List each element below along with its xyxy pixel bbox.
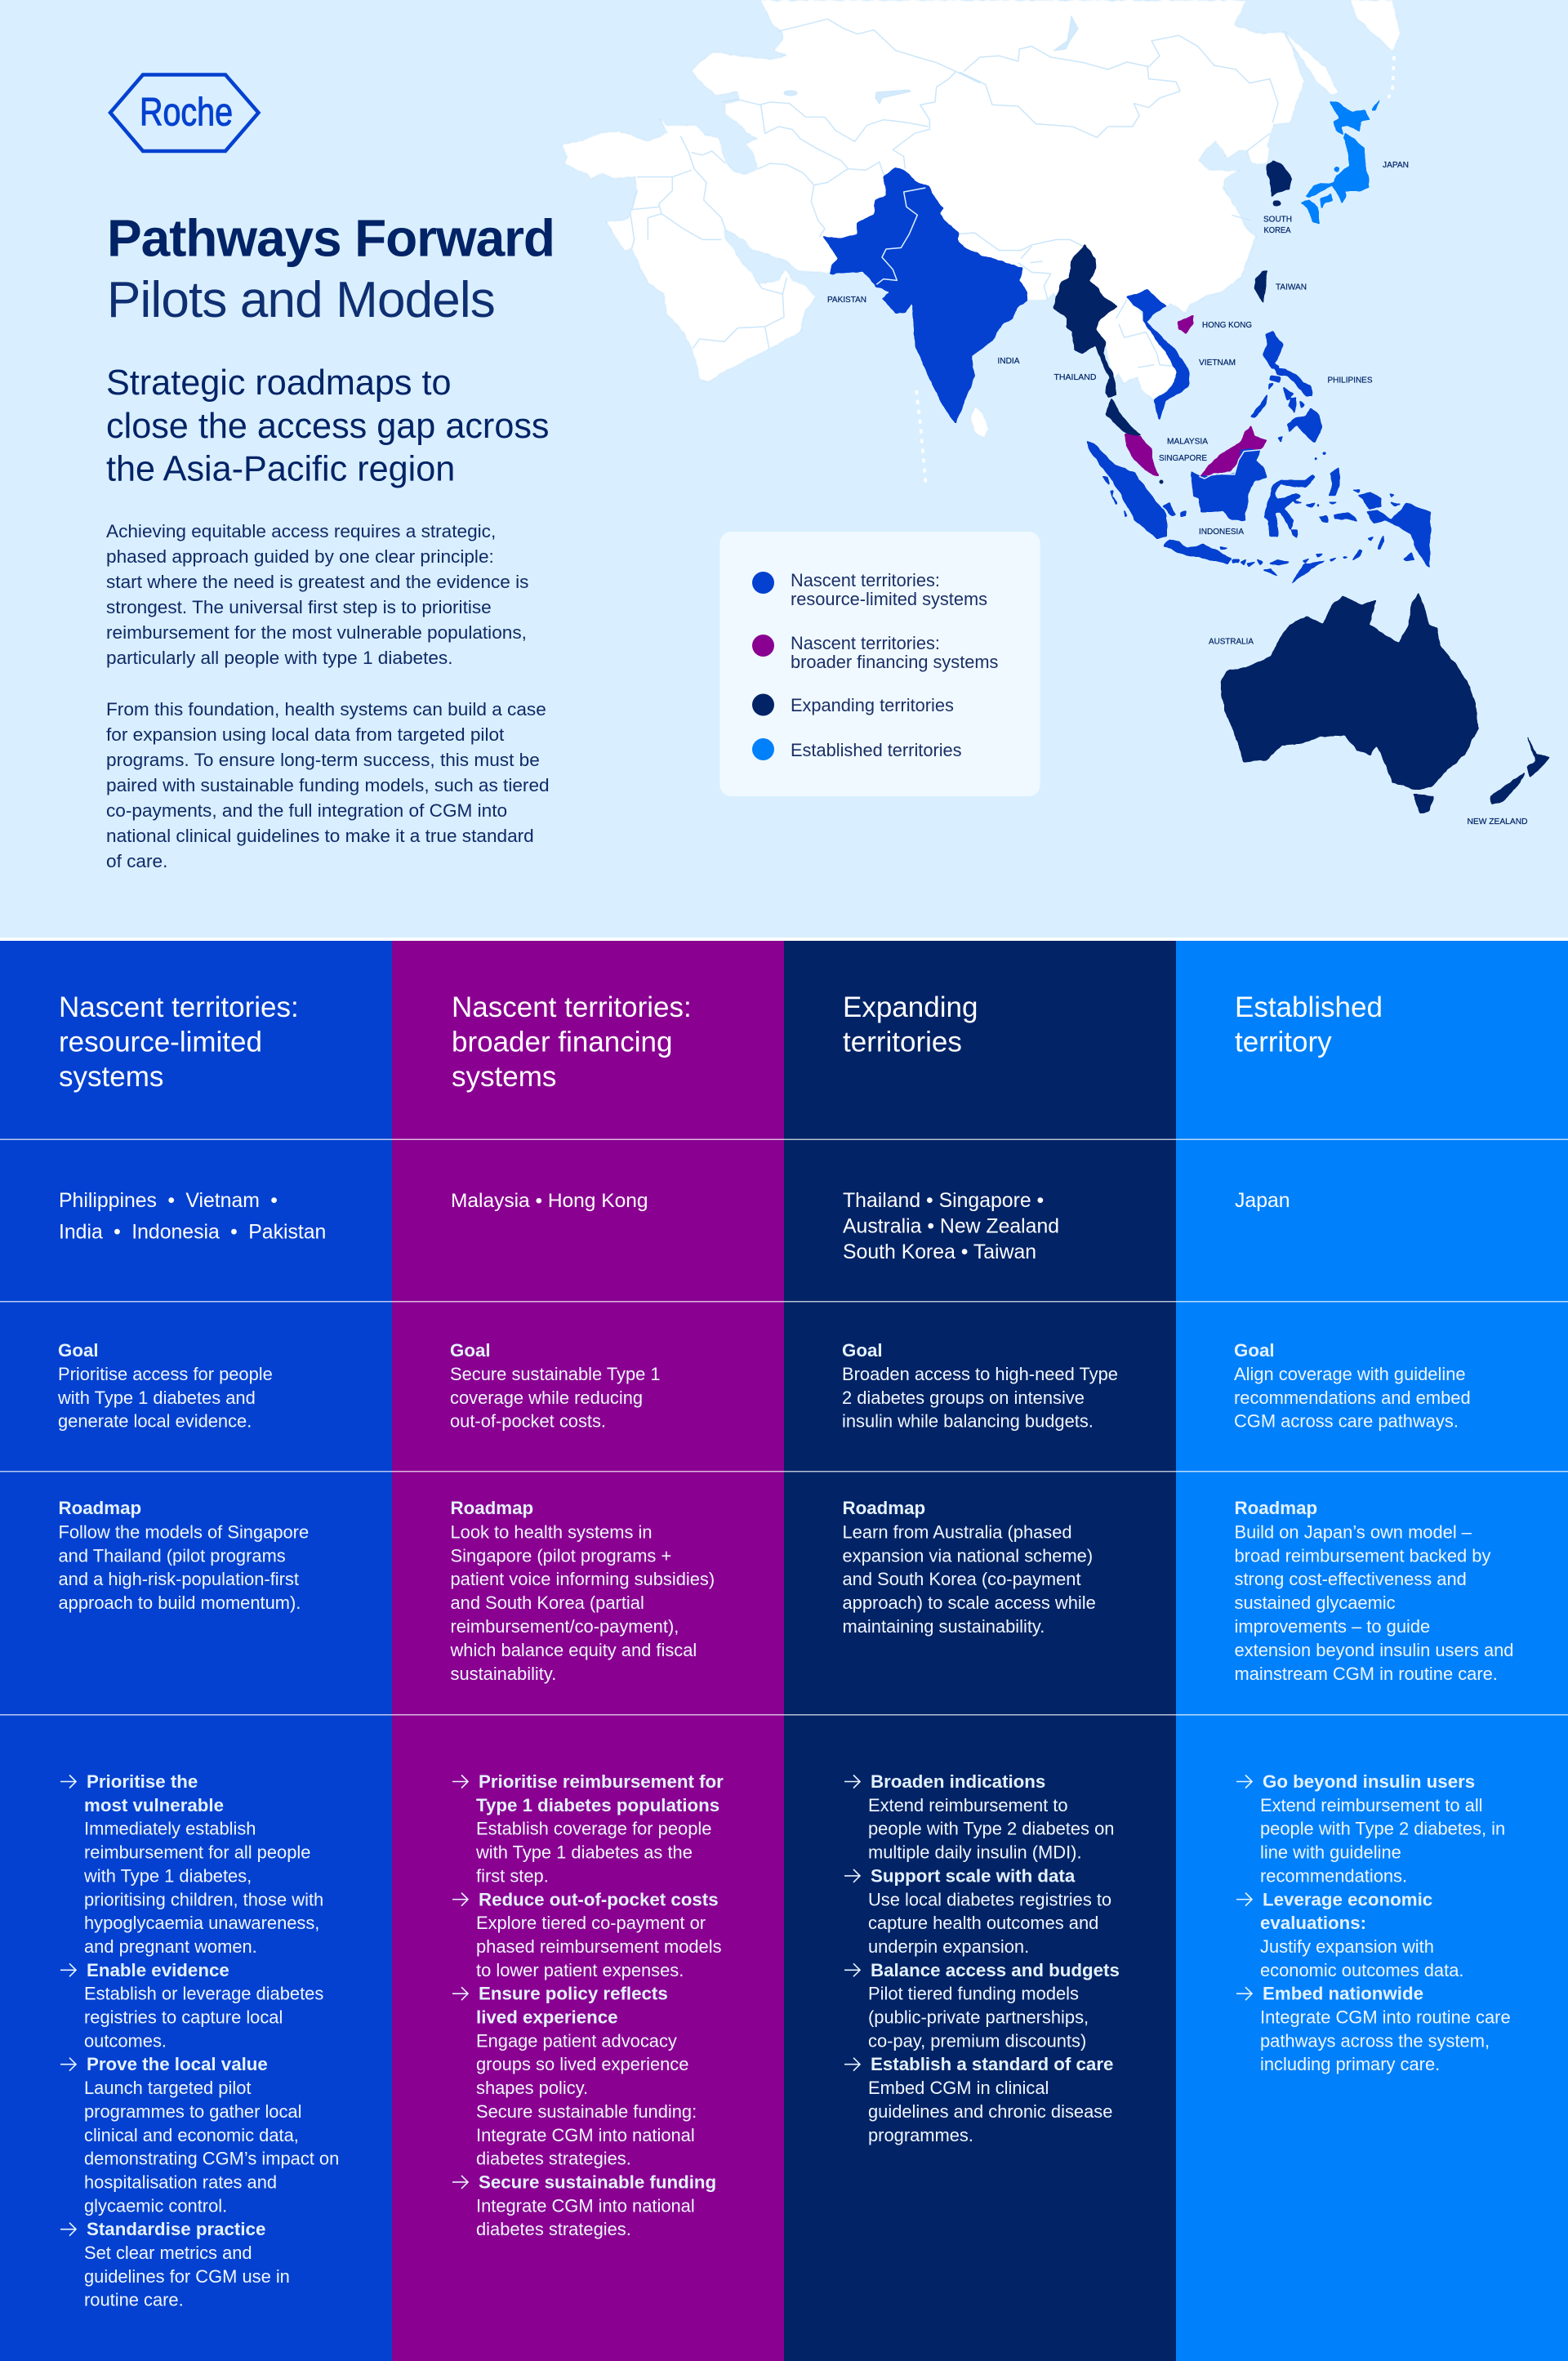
- actions list: Type 1 diabetes populations: [476, 1795, 719, 1815]
- actions list: with Type 1 diabetes as the: [475, 1842, 693, 1863]
- column heading: Nascent territories:: [452, 991, 692, 1023]
- goal: [842, 1340, 1118, 1431]
- goal: Broaden access to high-need Type: [842, 1364, 1118, 1384]
- column: nascent broader financing: [392, 941, 784, 2361]
- actions list: Establish or leverage diabetes: [84, 1984, 323, 2004]
- actions list: line with guideline: [1260, 1842, 1401, 1863]
- countries: [59, 1190, 326, 1244]
- actions list: reimbursement for all people: [84, 1842, 310, 1863]
- actions list: programmes to gather local: [84, 2101, 301, 2122]
- actions list: [60, 1771, 343, 2310]
- goal: Goal: [58, 1340, 99, 1361]
- intro paragraph two: of care.: [106, 851, 167, 871]
- column: nascent resource-limited: [0, 941, 392, 2361]
- map labels: JAPAN: [1383, 160, 1409, 170]
- map labels: VIETNAM: [1199, 358, 1236, 368]
- actions list: capture health outcomes and: [868, 1913, 1098, 1933]
- map: Maldives and Kuril dots: [916, 56, 1394, 488]
- goal: Align coverage with guideline: [1234, 1364, 1466, 1384]
- roadmap: [449, 1498, 715, 1684]
- actions list: guidelines for CGM use in: [84, 2266, 290, 2287]
- goal: Goal: [842, 1340, 883, 1361]
- roadmap: and a high-risk-population-first: [59, 1569, 299, 1589]
- actions list: Integrate CGM into national: [476, 2195, 695, 2216]
- column heading: systems: [452, 1061, 556, 1093]
- actions list: Enable evidence: [87, 1960, 229, 1980]
- actions list: Go beyond insulin users: [1263, 1771, 1475, 1792]
- map labels: NEW ZEALAND: [1467, 817, 1528, 826]
- map: eastern country borders: [957, 35, 1278, 368]
- actions list: Embed nationwide: [1263, 1984, 1423, 2004]
- roadmap: maintaining sustainability.: [843, 1616, 1045, 1637]
- actions list: routine care.: [84, 2290, 184, 2310]
- intro paragraph one: reimbursement for the most vulnerable populations,: [106, 622, 527, 643]
- map labels: MALAYSIA: [1167, 436, 1208, 446]
- roadmap: mainstream CGM in routine care.: [1235, 1664, 1498, 1684]
- map of Asia-Pacific: [562, 0, 1550, 826]
- actions list: people with Type 2 diabetes on: [868, 1819, 1114, 1839]
- map: New Zealand: [1490, 737, 1550, 805]
- goal: [450, 1340, 661, 1431]
- countries: Australia • New Zealand: [843, 1215, 1059, 1238]
- intro paragraph two: national clinical guidelines to make it a true standard: [106, 826, 534, 846]
- actions list: Support scale with data: [871, 1865, 1076, 1886]
- column heading: resource-limited: [59, 1027, 262, 1058]
- goal: Prioritise access for people: [58, 1364, 273, 1384]
- goal: insulin while balancing budgets.: [842, 1411, 1094, 1431]
- actions list: [452, 1771, 727, 2239]
- map: Malaysia: [1125, 426, 1267, 477]
- actions list: hospitalisation rates and: [84, 2172, 277, 2192]
- legend item: expanding: Expanding territories: [791, 695, 954, 715]
- actions list: pathways across the system,: [1260, 2030, 1490, 2051]
- subtitle: the Asia-Pacific region: [106, 449, 455, 488]
- roadmap: Roadmap: [843, 1498, 925, 1518]
- actions list: Secure sustainable funding: [479, 2172, 716, 2192]
- actions list: Extend reimbursement to all: [1260, 1795, 1483, 1815]
- roadmap: Look to health systems in: [451, 1522, 653, 1542]
- legend item: resource-limited: Nascent territories:: [791, 570, 940, 590]
- goal: with Type 1 diabetes and: [57, 1388, 256, 1408]
- goal: generate local evidence.: [58, 1411, 252, 1431]
- legend item: broader financing: Nascent territories:: [791, 633, 940, 653]
- roadmap: and South Korea (partial: [451, 1593, 644, 1613]
- legend item: broader financing: [752, 633, 999, 672]
- countries: Malaysia • Hong Kong: [451, 1190, 648, 1212]
- Roche logo: Roche: [140, 91, 233, 134]
- map labels: THAILAND: [1054, 372, 1097, 382]
- column heading: territory: [1235, 1027, 1332, 1058]
- legend panel: [720, 532, 1040, 796]
- actions list: Balance access and budgets: [871, 1960, 1120, 1980]
- map labels: PHILIPINES: [1328, 376, 1372, 385]
- map: Pakistan border line: [876, 188, 925, 284]
- intro paragraph two: [106, 699, 550, 871]
- map: South Korea and Taiwan: [1255, 161, 1292, 301]
- column heading: [1235, 991, 1383, 1058]
- map: Japan: [1301, 100, 1380, 223]
- column heading: [452, 991, 692, 1093]
- intro paragraph two: paired with sustainable funding models, such as tiered: [106, 775, 550, 795]
- column heading: Expanding: [843, 991, 978, 1023]
- actions list: economic outcomes data.: [1260, 1960, 1463, 1980]
- roadmap: Singapore (pilot programs +: [451, 1545, 671, 1566]
- actions list: demonstrating CGM’s impact on: [84, 2149, 339, 2169]
- map labels: INDONESIA: [1199, 527, 1244, 537]
- roadmap: reimbursement/co-payment),: [451, 1616, 679, 1637]
- countries: Thailand • Singapore •: [843, 1190, 1044, 1212]
- roadmap: which balance equity and fiscal: [449, 1640, 697, 1660]
- actions list: Pilot tiered funding models: [868, 1984, 1079, 2004]
- actions list: multiple daily insulin (MDI).: [868, 1842, 1082, 1863]
- actions list: Extend reimbursement to: [868, 1795, 1068, 1815]
- intro paragraph two: From this foundation, health systems can build a case: [106, 699, 546, 719]
- map: Hong Kong: [1178, 316, 1194, 333]
- map labels: AUSTRALIA: [1209, 637, 1254, 647]
- actions list: Embed CGM in clinical: [868, 2078, 1049, 2098]
- actions list: outcomes.: [84, 2030, 167, 2051]
- actions list: Broaden indications: [871, 1771, 1045, 1792]
- roadmap: sustainability.: [451, 1664, 556, 1684]
- actions list: [1236, 1771, 1514, 2074]
- actions list: Prove the local value: [87, 2054, 268, 2074]
- goal: coverage while reducing: [450, 1388, 643, 1408]
- countries: Japan: [1235, 1190, 1290, 1212]
- map: India and Pakistan: [823, 167, 1027, 423]
- actions list: Integrate CGM into national: [476, 2125, 695, 2145]
- countries: [843, 1190, 1059, 1263]
- actions list: underpin expansion.: [868, 1936, 1029, 1957]
- actions list: [844, 1771, 1123, 2145]
- actions list: most vulnerable: [84, 1795, 224, 1815]
- column heading: broader financing: [452, 1027, 672, 1058]
- map labels: [827, 160, 1528, 826]
- actions list: prioritising children, those with: [84, 1889, 323, 1909]
- actions list: Integrate CGM into routine care: [1260, 2007, 1511, 2028]
- actions list: Launch targeted pilot: [84, 2078, 251, 2098]
- roadmap: approach) to scale access while: [843, 1593, 1096, 1613]
- map: Vietnam: [1127, 290, 1190, 419]
- intro paragraph one: Achieving equitable access requires a strategic,: [106, 521, 496, 541]
- title: [107, 209, 555, 328]
- intro paragraph two: co-payments, and the full integration of CGM into: [106, 800, 507, 821]
- actions list: guidelines and chronic disease: [868, 2101, 1112, 2122]
- roadmap: extension beyond insulin users and: [1235, 1640, 1513, 1660]
- actions list: Leverage economic: [1263, 1889, 1432, 1909]
- legend item: established: Established territories: [791, 740, 962, 760]
- actions list: Standardise practice: [87, 2219, 265, 2239]
- actions list: programmes.: [868, 2125, 973, 2145]
- actions list: Immediately establish: [84, 1819, 256, 1839]
- legend item: resource-limited: [752, 570, 987, 609]
- legend item: resource-limited: resource-limited systems: [791, 589, 987, 609]
- goal: Goal: [1234, 1340, 1275, 1361]
- map: lakes: [784, 16, 1078, 104]
- actions list: Explore tiered co-payment or: [476, 1913, 706, 1933]
- intro paragraph one: strongest. The universal first step is to prioritise: [106, 597, 492, 617]
- roadmap: strong cost-effectiveness and: [1235, 1569, 1467, 1589]
- intro paragraph two: programs. To ensure long-term success, this must be: [106, 750, 540, 770]
- roadmap: Follow the models of Singapore: [59, 1522, 309, 1542]
- roadmap: expansion via national scheme): [843, 1545, 1093, 1566]
- map labels: SINGAPORE: [1159, 453, 1207, 463]
- roadmap: and Thailand (pilot programs: [59, 1545, 286, 1566]
- actions list: co-pay, premium discounts): [868, 2030, 1086, 2051]
- roadmap: Roadmap: [451, 1498, 533, 1518]
- countries: India • Indonesia • Pakistan: [59, 1222, 326, 1244]
- roadmap: broad reimbursement backed by: [1235, 1545, 1490, 1566]
- map labels: KOREA: [1264, 225, 1290, 235]
- actions list: diabetes strategies.: [476, 2149, 631, 2169]
- actions list: Set clear metrics and: [84, 2243, 252, 2263]
- actions list: registries to capture local: [84, 2007, 283, 2028]
- actions list: Establish coverage for people: [476, 1819, 711, 1839]
- subtitle: close the access gap across: [106, 407, 550, 446]
- actions list: Reduce out-of-pocket costs: [479, 1889, 719, 1909]
- actions list: (public-private partnerships,: [868, 2007, 1089, 2028]
- column heading: systems: [59, 1061, 163, 1093]
- column heading: [843, 991, 978, 1058]
- map: western country borders: [630, 19, 980, 349]
- actions list: Use local diabetes registries to: [868, 1889, 1111, 1909]
- countries: Philippines • Vietnam •: [59, 1190, 278, 1212]
- legend item: broader financing: broader financing systems: [791, 652, 999, 672]
- roadmap: approach to build momentum).: [59, 1593, 301, 1613]
- map: mainland Asia: [562, 0, 1401, 439]
- roadmap: Roadmap: [59, 1498, 141, 1518]
- actions list: groups so lived experience: [476, 2054, 688, 2074]
- goal: Goal: [450, 1340, 491, 1361]
- roadmap: sustained glycaemic: [1235, 1593, 1396, 1613]
- roadmap: Roadmap: [1235, 1498, 1317, 1518]
- title: Pathways Forward: [107, 209, 555, 268]
- actions list: and pregnant women.: [84, 1936, 257, 1957]
- Roche logo: [110, 75, 258, 151]
- map labels: TAIWAN: [1276, 283, 1307, 292]
- actions list: Prioritise the: [87, 1771, 198, 1792]
- column: established territory: [1176, 941, 1568, 2361]
- actions list: Prioritise reimbursement for: [479, 1771, 724, 1792]
- roadmap: and South Korea (co-payment: [843, 1569, 1081, 1589]
- roadmap: patient voice informing subsidies): [451, 1569, 715, 1589]
- map labels: HONG KONG: [1202, 320, 1252, 330]
- map: Singapore: [1160, 480, 1163, 483]
- actions list: Engage patient advocacy: [476, 2030, 677, 2051]
- actions list: Ensure policy reflects: [479, 1984, 668, 2004]
- goal: 2 diabetes groups on intensive: [842, 1388, 1085, 1408]
- column heading: Established: [1235, 991, 1383, 1023]
- goal: out-of-pocket costs.: [450, 1411, 606, 1431]
- goal: [1234, 1340, 1471, 1431]
- actions list: glycaemic control.: [84, 2195, 227, 2216]
- roadmap: improvements – to guide: [1235, 1616, 1430, 1637]
- map: Borneo border line: [1199, 450, 1262, 479]
- column heading: [59, 991, 299, 1093]
- actions list: to lower patient expenses.: [476, 1960, 684, 1980]
- intro paragraph two: for expansion using local data from targeted pilot: [106, 724, 505, 745]
- column heading: territories: [843, 1027, 962, 1058]
- actions list: Justify expansion with: [1260, 1936, 1434, 1957]
- title: Pilots and Models: [107, 272, 495, 328]
- actions list: people with Type 2 diabetes, in: [1260, 1819, 1505, 1839]
- subtitle: [106, 363, 550, 488]
- actions list: including primary care.: [1260, 2054, 1440, 2074]
- roadmap: [843, 1498, 1096, 1637]
- actions list: with Type 1 diabetes,: [83, 1865, 252, 1886]
- goal: [57, 1340, 273, 1431]
- intro paragraph one: particularly all people with type 1 diabetes.: [106, 648, 453, 668]
- intro paragraph one: start where the need is greatest and the evidence is: [106, 572, 528, 592]
- map: Thailand and Myanmar region: [1054, 245, 1141, 435]
- actions list: clinical and economic data,: [84, 2125, 299, 2145]
- map: Indonesia: [1088, 441, 1431, 582]
- actions list: Secure sustainable funding:: [476, 2101, 697, 2122]
- intro paragraph one: phased approach guided by one clear principle:: [106, 546, 494, 567]
- map labels: PAKISTAN: [827, 295, 866, 305]
- subtitle: Strategic roadmaps to: [106, 363, 451, 403]
- roadmap: [1235, 1498, 1513, 1684]
- roadmap: Learn from Australia (phased: [843, 1522, 1072, 1542]
- roadmap: [59, 1498, 309, 1613]
- actions list: hypoglycaemia unawareness,: [84, 1913, 319, 1933]
- actions list: lived experience: [476, 2007, 618, 2028]
- intro paragraph one: [106, 521, 528, 668]
- countries: South Korea • Taiwan: [843, 1241, 1036, 1263]
- actions list: recommendations.: [1260, 1865, 1407, 1886]
- white separator strip: [0, 938, 1568, 941]
- column: expanding territories: [784, 941, 1176, 2361]
- actions list: phased reimbursement models: [476, 1936, 722, 1957]
- map: Australia: [1221, 593, 1478, 813]
- goal: recommendations and embed: [1234, 1388, 1471, 1408]
- actions list: first step.: [476, 1865, 549, 1886]
- goal: Secure sustainable Type 1: [450, 1364, 661, 1384]
- map labels: SOUTH: [1263, 214, 1292, 224]
- actions list: diabetes strategies.: [476, 2219, 631, 2239]
- actions list: Establish a standard of care: [871, 2054, 1113, 2074]
- map labels: INDIA: [998, 356, 1019, 366]
- map: Philippines: [1251, 331, 1325, 461]
- column heading: Nascent territories:: [59, 991, 299, 1023]
- actions list: evaluations:: [1260, 1913, 1366, 1933]
- goal: CGM across care pathways.: [1234, 1411, 1459, 1431]
- actions list: shapes policy.: [476, 2078, 588, 2098]
- roadmap: Build on Japan’s own model –: [1235, 1522, 1472, 1542]
- top section background: [0, 0, 1568, 938]
